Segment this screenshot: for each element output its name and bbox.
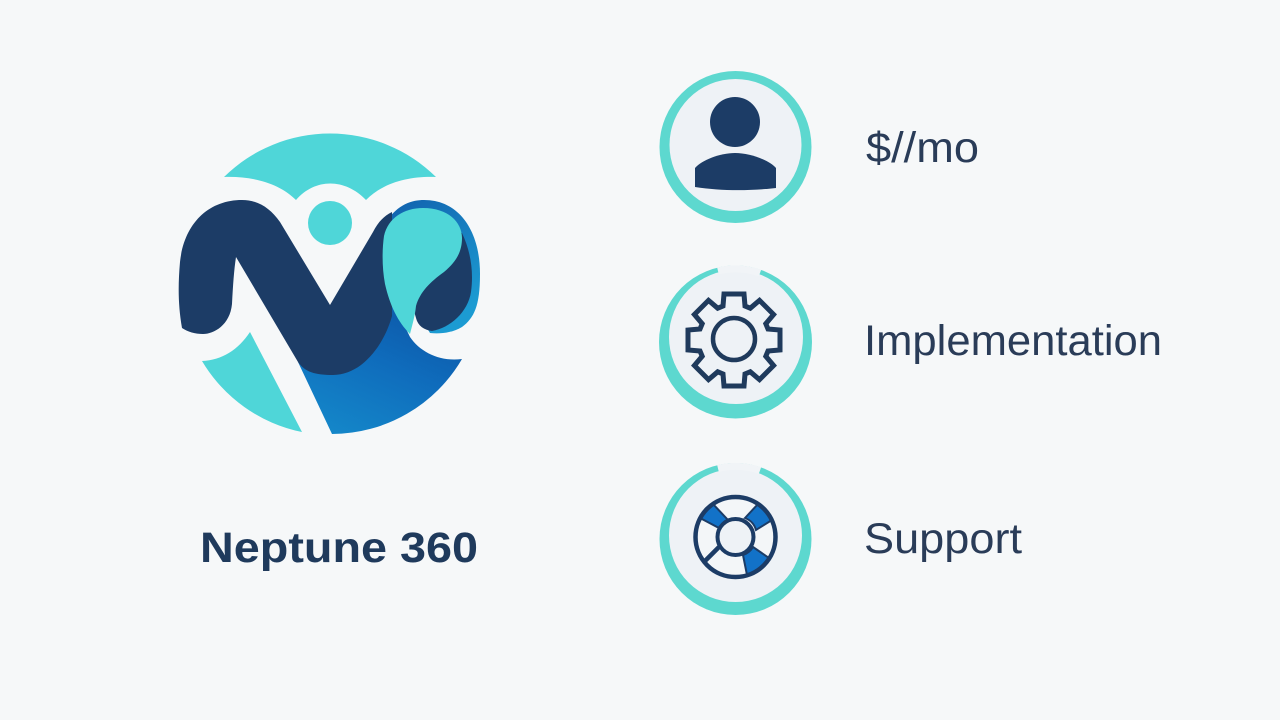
label: implementation: Implementation [864,317,1162,365]
row: support [660,463,1022,615]
logo: top teal arc [224,134,436,200]
logo: lower blue wave [298,300,462,434]
logo: inner navy curl [405,225,472,331]
logo: right outer blue swirl [386,200,480,333]
icon: lifebuoy in ring [660,463,812,615]
row: implementation [659,266,1162,418]
logo: teal dot [308,201,352,245]
logo: lower left teal wedge [202,332,302,432]
logo: teal drop [383,208,462,334]
icon: person in ring [660,71,812,223]
logo: navy M shape [179,200,392,375]
logo: Neptune 360 circular M mark [179,134,480,434]
icon: gear in ring [659,266,812,418]
product name: Neptune 360 [200,524,478,572]
row: pricing [660,71,979,223]
label: support: Support [864,515,1022,563]
label: price: $//mo [866,124,979,172]
